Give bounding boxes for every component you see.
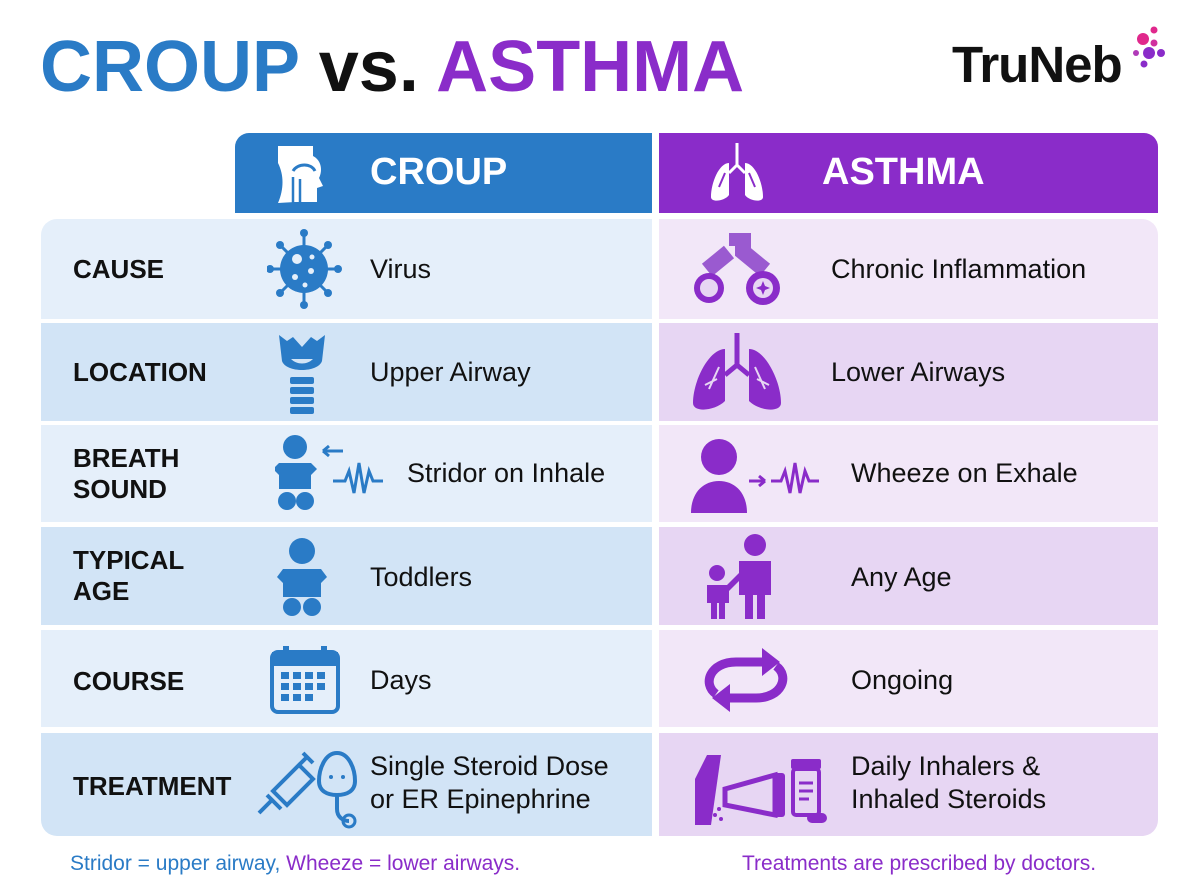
row: course: COURSE [73, 666, 184, 696]
row: treatment: Daily Inhalers & [851, 751, 1040, 781]
row: typical age: Toddlers [370, 562, 472, 592]
row: location: Upper Airway [370, 357, 531, 387]
icon: adult with wheeze wave [691, 439, 819, 513]
header: asthma: ASTHMA [822, 151, 985, 193]
row: breath sound: BREATH [73, 443, 179, 473]
icon: larynx [279, 335, 325, 414]
icon: child with stridor wave [275, 435, 383, 510]
title: CROUP vs. ASTHMA [40, 27, 744, 107]
row: typical age: Any Age [851, 562, 952, 592]
icon: cycle arrows [704, 648, 788, 712]
panel: asthma column background [659, 219, 1158, 836]
icon: inhalers and pills [695, 755, 827, 825]
logo: TruNeb: TruNeb [952, 36, 1122, 93]
row: cause: Chronic Inflammation [831, 254, 1086, 284]
icon: lungs [693, 333, 781, 410]
row: treatment: or ER Epinephrine [370, 784, 591, 814]
row: breath sound: SOUND [73, 474, 167, 504]
row: location [73, 333, 1005, 414]
row: treatment [73, 751, 1046, 828]
icon: virus [267, 229, 342, 309]
row: location: LOCATION [73, 357, 207, 387]
row: breath sound: Wheeze on Exhale [851, 458, 1078, 488]
row: location: Lower Airways [831, 357, 1005, 387]
row: typical age: TYPICAL [73, 545, 184, 575]
row: cause: Virus [370, 254, 431, 284]
header: croup: CROUP [370, 151, 507, 193]
row: course: Ongoing [851, 665, 953, 695]
panel: croup column background [41, 219, 652, 836]
row: treatment: Single Steroid Dose [370, 751, 609, 781]
icon: syringe and mask [258, 751, 357, 828]
footer note: left: Stridor = upper airway, Wheeze = lower airways. [70, 852, 520, 875]
icon: inflamed bronchi [694, 233, 780, 305]
header: asthma [659, 133, 1158, 213]
row: breath sound: Stridor on Inhale [407, 458, 605, 488]
row: cause: CAUSE [73, 254, 164, 284]
icon: head airway [278, 146, 323, 203]
row: typical age: AGE [73, 576, 129, 606]
row: course [73, 646, 953, 714]
logo: TruNeb [952, 26, 1165, 93]
icon: lungs [711, 143, 763, 201]
icon: toddler [277, 538, 327, 616]
row: treatment: Inhaled Steroids [851, 784, 1046, 814]
row: typical age [73, 534, 952, 619]
icon: parent and child [707, 534, 771, 619]
icon: calendar [270, 646, 340, 714]
row: cause [73, 229, 1086, 309]
row: treatment: TREATMENT [73, 771, 231, 801]
row: breath sound [73, 435, 1078, 513]
header: croup [235, 133, 652, 213]
footer note: right: Treatments are prescribed by doctors. [742, 852, 1096, 875]
row: course: Days [370, 665, 432, 695]
